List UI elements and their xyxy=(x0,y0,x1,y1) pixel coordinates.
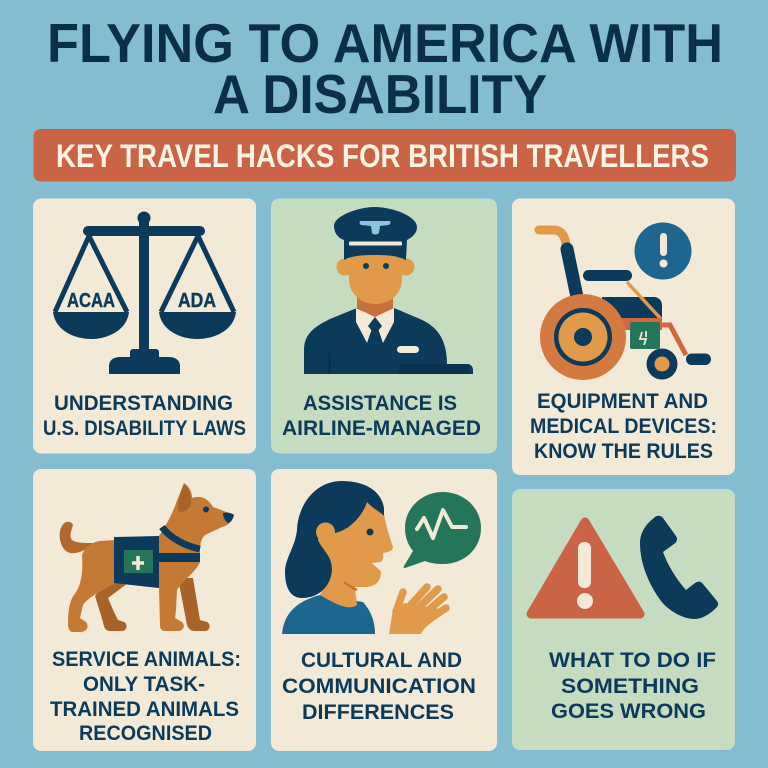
icon: warning triangle xyxy=(531,522,640,614)
panel: understanding U.S. disability laws xyxy=(33,198,256,454)
title: FLYING TO AMERICA WITH xyxy=(47,12,723,74)
label: what to do: WHAT TO DO IF xyxy=(549,649,716,672)
icon: airline staff member xyxy=(304,207,473,374)
label: what to do xyxy=(549,649,716,723)
label: service animals: TRAINED ANIMALS xyxy=(50,698,239,721)
banner: subtitle xyxy=(34,129,736,182)
icon: wheelchair with battery xyxy=(539,230,711,380)
icon: speech bubble with pulse xyxy=(404,492,481,568)
panel: assistance is airline-managed xyxy=(271,198,497,454)
label: service animals xyxy=(50,648,241,745)
icon: alert circle xyxy=(634,222,692,280)
label: equipment: MEDICAL DEVICES: xyxy=(530,415,717,438)
label: cultural: CULTURAL AND xyxy=(301,649,462,672)
title xyxy=(47,12,723,125)
label: equipment xyxy=(530,390,717,463)
icon: scales of justice with ACAA and ADA: ADA xyxy=(178,290,216,312)
label: service animals: RECOGNISED xyxy=(79,722,212,745)
label: cultural: COMMUNICATION xyxy=(282,675,476,698)
label: service animals: SERVICE ANIMALS: xyxy=(52,648,241,671)
label: equipment: KNOW THE RULES xyxy=(534,440,713,463)
panel: what to do if something goes wrong xyxy=(512,489,735,750)
icon: telephone handset xyxy=(640,516,718,619)
label: cultural xyxy=(282,649,476,724)
icon: waving hand xyxy=(389,587,446,634)
icon: service dog with vest xyxy=(60,483,234,632)
label: assistance: ASSISTANCE IS xyxy=(303,392,457,415)
icon: woman speaking xyxy=(282,481,393,634)
panel: cultural and communication differences xyxy=(271,469,497,751)
label: assistance xyxy=(282,392,481,440)
panel: equipment and medical devices xyxy=(512,198,735,475)
label: understanding xyxy=(43,392,246,440)
icon: scales of justice with ACAA and ADA xyxy=(53,212,236,374)
label: what to do: GOES WRONG xyxy=(551,700,706,723)
label: assistance: AIRLINE-MANAGED xyxy=(282,417,481,440)
icon: scales of justice with ACAA and ADA: ACAA xyxy=(67,290,115,312)
title: A DISABILITY xyxy=(213,63,547,125)
label: equipment: EQUIPMENT AND xyxy=(537,390,708,413)
label: what to do: SOMETHING xyxy=(561,675,699,698)
label: understanding: UNDERSTANDING xyxy=(54,392,233,415)
label: understanding: U.S. DISABILITY LAWS xyxy=(43,417,246,440)
label: cultural: DIFFERENCES xyxy=(302,701,454,724)
panel: service animals xyxy=(33,469,256,751)
label: service animals: ONLY TASK- xyxy=(83,673,205,696)
